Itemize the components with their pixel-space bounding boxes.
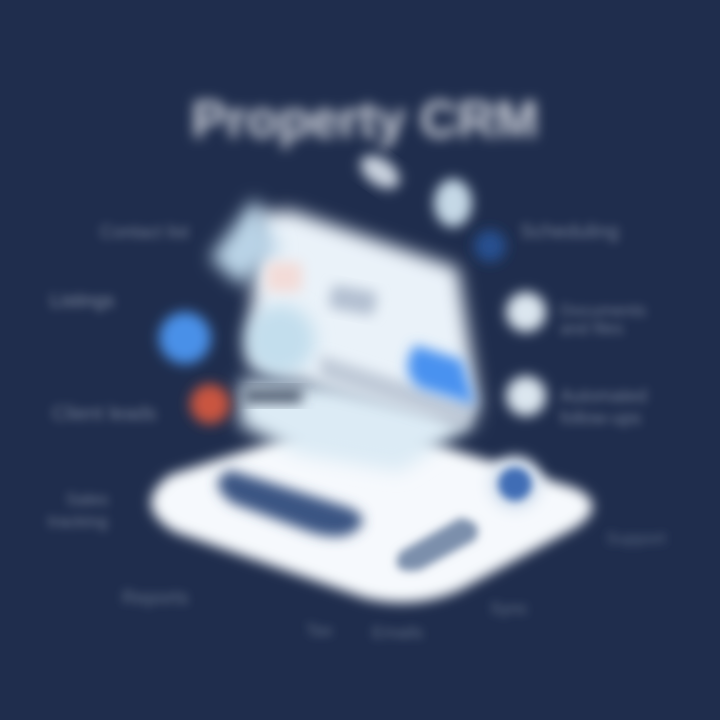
label: left 1: Contact list [100,222,189,242]
label: right 1: Scheduling [520,221,619,243]
laptop screen [210,198,480,472]
trackpad slot [397,518,478,571]
label: bottom 2: Emails [372,623,423,642]
icon: top badge [434,179,472,227]
label: left 4: Sales [66,490,109,509]
icon: dark blue dot right [474,230,506,262]
laptop base [151,424,593,602]
label: right 3 [560,386,647,428]
icon: red circle left [190,384,230,424]
grey strip across screen [320,355,475,428]
icon: blue circle left [159,312,211,364]
label: left 4: tracking [48,512,108,531]
icon: base button [498,467,532,501]
label: left 2: Listings [50,291,114,312]
label: right 3: Automated [560,386,647,406]
label: bottom 1: Tax [306,621,333,640]
icon: pale dot right upper [506,292,546,332]
keyboard slot [218,470,362,537]
icon: pale dot right lower [506,376,546,416]
lower sheet [240,380,480,472]
pale circle on screen [245,305,315,375]
dark label bar [244,389,302,403]
screen tab [210,198,280,285]
icon: base button halo [487,456,543,512]
label: right 2: and files [560,319,623,338]
icon: cursor near title [355,149,405,195]
blue card [408,345,475,405]
text bar on screen [328,284,378,316]
label: left 4 [48,490,109,531]
label: left 3: Client leads [52,403,157,425]
label: right 2 [560,301,646,338]
label: bottom 3: Sync [490,599,528,618]
label: right 4: Support [606,529,666,548]
title: Property CRM [192,91,538,149]
pink swatch [266,262,302,292]
label: right 2: Documents [560,301,646,320]
label: right 3: follow-ups [560,408,641,428]
label: left 5: Reports [122,588,189,609]
